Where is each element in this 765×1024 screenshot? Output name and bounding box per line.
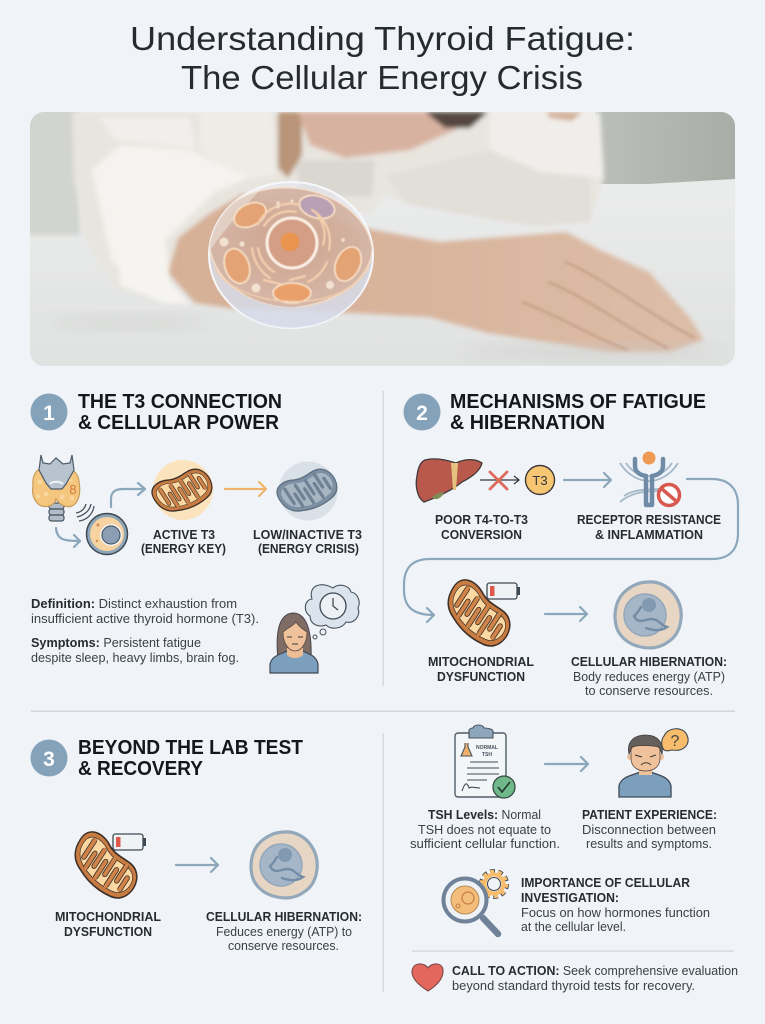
label: cellular hibernation: CELLULAR HIBERNATION: [206, 910, 362, 924]
call to action [412, 964, 738, 993]
icon: confused patient [619, 729, 688, 797]
text: call to action [452, 964, 738, 993]
section 1: the T3 connection [30, 391, 362, 673]
heading 1 [78, 391, 282, 434]
heading 2: MECHANISMS OF FATIGUE [450, 391, 706, 413]
heading 1: & CELLULAR POWER [78, 412, 280, 434]
arrow: winding connector to mitochondrial dysfunction [404, 479, 738, 622]
label: active T3: (ENERGY KEY) [141, 542, 226, 556]
icon: thyroid gland [33, 455, 80, 521]
title: The Cellular Energy Crisis [181, 59, 583, 96]
text: patient experience: PATIENT EXPERIENCE: [582, 808, 717, 822]
heading 1: THE T3 CONNECTION [78, 391, 282, 413]
text: call to action: beyond standard thyroid tests for recovery. [452, 979, 695, 993]
text: importance of cellular investigation: IMPORTANCE OF CELLULAR [521, 876, 690, 890]
sleeve highlights [93, 146, 240, 264]
label: cellular hibernation [206, 910, 362, 953]
icon: low battery [487, 583, 520, 599]
text: patient experience [582, 808, 717, 851]
title [130, 20, 635, 96]
icon: hibernating cell [251, 832, 317, 898]
badge 2 [404, 394, 440, 430]
heading 2: & HIBERNATION [450, 412, 605, 434]
arrow: mitochondria to hibernation [176, 858, 218, 872]
icon: T3 badge: T3 [532, 473, 548, 488]
label: cellular hibernation: to conserve resources. [585, 684, 713, 698]
icon: heart [412, 964, 443, 991]
badge 3 [30, 740, 68, 776]
icon: lab report clipboard: TSH [482, 752, 492, 758]
icon: T3 badge [526, 466, 554, 494]
heading 2 [450, 391, 706, 434]
badge 1 [30, 394, 68, 430]
vertical divider lower [382, 733, 384, 992]
text: definition and symptoms: Definition: Distinct exhaustion from [31, 597, 237, 611]
arrow: active to low T3 [225, 482, 266, 496]
icon: tired woman with thought cloud [270, 585, 359, 673]
title: Understanding Thyroid Fatigue: [130, 20, 635, 57]
label: poor conversion [435, 513, 528, 542]
text: TSH levels [410, 808, 560, 851]
heading 3 [78, 737, 303, 780]
right column: tests, patient, investigation [410, 725, 717, 934]
label: mitochondrial dysfunction: MITOCHONDRIAL [428, 655, 534, 669]
vertical divider upper [382, 391, 384, 686]
hero photo: tired woman with hologram cell on her forearm [20, 105, 735, 366]
icon: lab report clipboard: NORMAL [476, 745, 498, 751]
section 3: beyond the lab test [30, 737, 362, 953]
section 2: mechanisms of fatigue [404, 391, 738, 698]
icon: failing mitochondrion with low battery [63, 827, 148, 905]
horizontal divider [31, 710, 735, 712]
icon: lab report clipboard [455, 725, 515, 798]
icon: liver [416, 459, 482, 502]
text: patient experience: Disconnection between [582, 823, 716, 837]
text: call to action: CALL TO ACTION: Seek comprehensive evaluation [452, 964, 738, 978]
text: patient experience: results and symptoms. [586, 837, 712, 851]
icon: hibernating cell [615, 582, 681, 648]
text: importance of cellular investigation: at the cellular level. [521, 920, 626, 934]
label: low T3: (ENERGY CRISIS) [258, 542, 359, 556]
text: importance of cellular investigation: INVESTIGATION: [521, 891, 619, 905]
call-to-action divider [412, 950, 734, 952]
text: definition and symptoms: despite sleep, heavy limbs, brain fog. [31, 651, 239, 665]
icon: active mitochondrion [148, 458, 218, 523]
icon: failing mitochondrion with low battery [436, 575, 521, 653]
label: receptor resistance: RECEPTOR RESISTANCE [577, 513, 721, 527]
arrow: mitochondria to hibernation [545, 607, 587, 621]
label: cellular hibernation: conserve resources. [228, 939, 339, 953]
label: mitochondrial dysfunction [55, 910, 161, 939]
label: cellular hibernation: Body reduces energy (ATP) [573, 670, 725, 684]
label: mitochondrial dysfunction: DYSFUNCTION [437, 670, 525, 684]
icon: low energy mitochondrion [273, 458, 343, 523]
label: mitochondrial dysfunction: MITOCHONDRIAL [55, 910, 161, 924]
icon: magnifier with gear [444, 872, 506, 934]
label: mitochondrial dysfunction [428, 655, 534, 684]
arrow: T3 to receptor [564, 473, 611, 487]
arrow: thyroid to cell [56, 528, 80, 547]
label: mitochondrial dysfunction: DYSFUNCTION [64, 925, 152, 939]
hologram cell [200, 175, 373, 328]
icon: cell [86, 514, 128, 554]
arrow: test to patient [545, 757, 588, 771]
label: low T3: LOW/INACTIVE T3 [253, 528, 362, 542]
label: poor conversion: CONVERSION [441, 528, 522, 542]
text: TSH levels: TSH does not equate to [418, 823, 551, 837]
label: cellular hibernation [571, 655, 727, 698]
badge 2: 2 [416, 402, 428, 425]
icon: low battery [113, 834, 146, 850]
label: active T3: ACTIVE T3 [153, 528, 215, 542]
label: receptor resistance [577, 513, 721, 542]
text: TSH levels: TSH Levels: Normal [428, 808, 541, 822]
text: importance of cellular investigation: Focus on how hormones function [521, 906, 710, 920]
text: definition and symptoms: Symptoms: Persistent fatigue [31, 636, 201, 650]
label: low T3 [253, 528, 362, 556]
heading 3: & RECOVERY [78, 758, 204, 780]
label: poor conversion: POOR T4-TO-T3 [435, 513, 528, 527]
badge 1: 1 [43, 402, 55, 425]
icon: thyroid gland: 8 [69, 482, 77, 497]
label: active T3 [141, 528, 226, 556]
badge 3: 3 [43, 748, 55, 771]
text: definition and symptoms: insufficient active thyroid hormone (T3). [31, 612, 259, 626]
icon: blocked conversion arrow [480, 472, 519, 489]
arm and hand [168, 193, 704, 352]
icon: signal waves [76, 504, 94, 521]
shirt base [72, 112, 605, 272]
text: TSH levels: sufficient cellular function. [410, 837, 560, 851]
arrow: cell to active T3 [111, 483, 145, 507]
text: definition and symptoms [31, 597, 259, 665]
label: receptor resistance: & INFLAMMATION [595, 528, 703, 542]
label: cellular hibernation: Feduces energy (ATP) to [216, 925, 352, 939]
label: cellular hibernation: CELLULAR HIBERNATION: [571, 655, 727, 669]
text: importance of cellular investigation [521, 876, 710, 934]
heading 3: BEYOND THE LAB TEST [78, 737, 303, 759]
icon: blocked receptor [620, 452, 680, 506]
icon: confused patient: ? [671, 733, 680, 750]
